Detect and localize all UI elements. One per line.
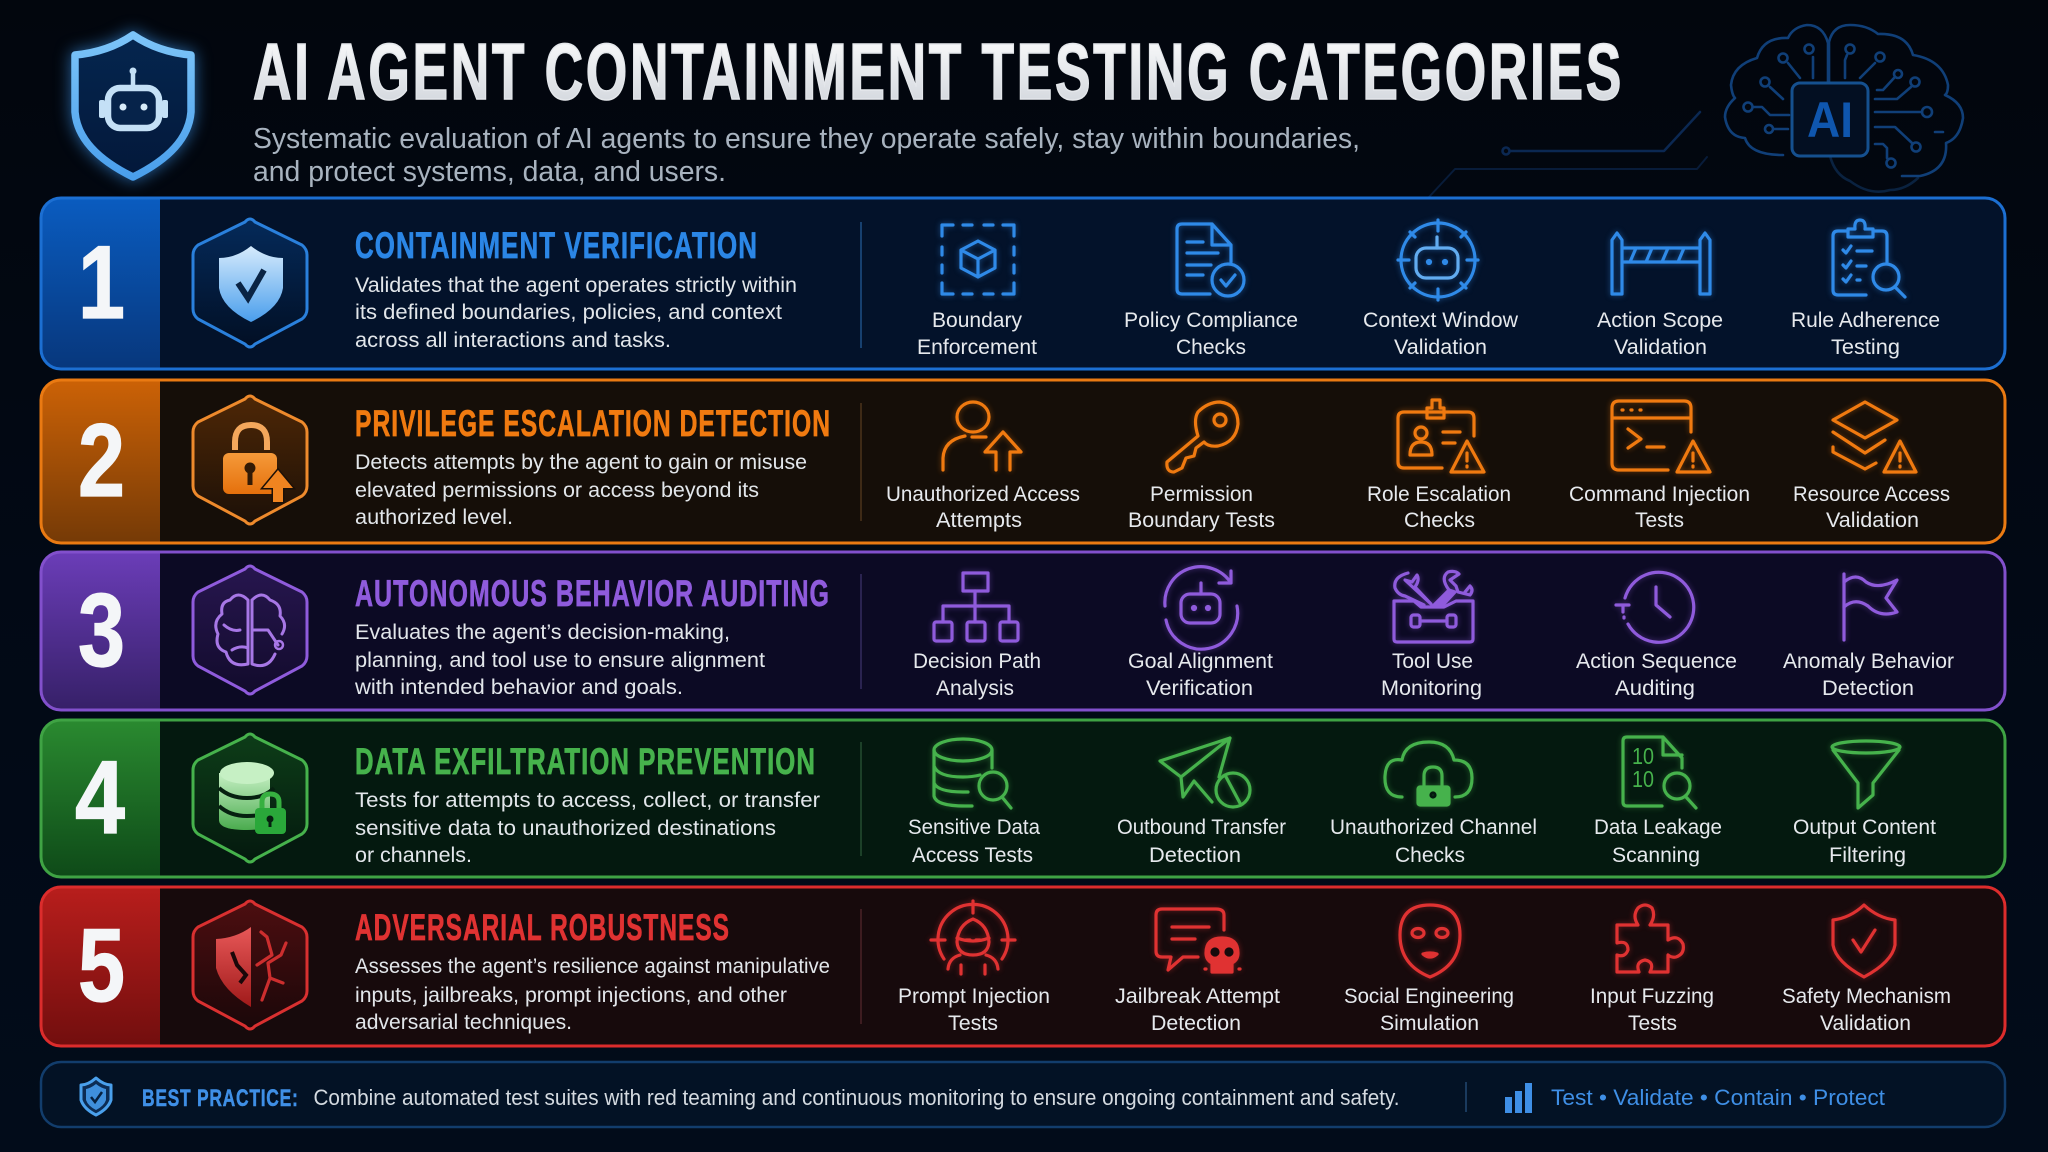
description bbox=[355, 789, 820, 867]
decorative AI brain circuit: AI bbox=[1807, 92, 1853, 148]
item: command injection tests: Tests bbox=[1635, 509, 1684, 532]
item: role escalation checks: Role Escalation bbox=[1367, 483, 1511, 506]
item: sensitive data access tests: Access Tests bbox=[912, 844, 1033, 867]
item: outbound transfer detection: Outbound Transfer bbox=[1117, 816, 1286, 839]
decorative AI brain circuit bbox=[1429, 25, 1963, 197]
item: permission boundary tests bbox=[1128, 402, 1275, 532]
item: tool use monitoring bbox=[1381, 571, 1482, 700]
item: data leakage scanning bbox=[1594, 737, 1722, 867]
item: anomaly behavior detection: Anomaly Behavior bbox=[1783, 650, 1954, 673]
item: sensitive data access tests: Sensitive Data bbox=[908, 816, 1040, 839]
description: Evaluates the agent’s decision-making, bbox=[355, 621, 730, 644]
number 1: 1 bbox=[78, 225, 125, 341]
motto: Test • Validate • Contain • Protect bbox=[1551, 1085, 1885, 1110]
footer: best practice bar bbox=[41, 1062, 2005, 1127]
item: policy compliance checks: Policy Compliance bbox=[1124, 309, 1298, 332]
item: data leakage scanning: Data Leakage bbox=[1594, 816, 1722, 839]
item: decision path analysis bbox=[913, 573, 1041, 700]
item: permission boundary tests: Permission bbox=[1150, 483, 1253, 506]
item: boundary enforcement: Enforcement bbox=[917, 336, 1037, 359]
subtitle: Systematic evaluation of AI agents to ensure they operate safely, stay within boundaries, bbox=[253, 123, 1360, 155]
item: data leakage scanning: 10 bbox=[1632, 766, 1654, 792]
item: safety mechanism validation: Safety Mechanism bbox=[1782, 985, 1951, 1008]
description: its defined boundaries, policies, and context bbox=[355, 301, 782, 324]
number 4: 4 bbox=[75, 740, 125, 856]
item: social engineering simulation: Simulation bbox=[1380, 1012, 1479, 1035]
panel: 3 autonomous behavior auditing bbox=[41, 552, 2005, 710]
item: role escalation checks: Checks bbox=[1404, 509, 1475, 532]
hexagon icon: brain bbox=[193, 566, 307, 694]
item: decision path analysis: Analysis bbox=[936, 677, 1014, 700]
hexagon icon: cracked shield bbox=[193, 901, 307, 1029]
item: social engineering simulation: Social Engineering bbox=[1344, 985, 1514, 1008]
best practice label: BEST PRACTICE: bbox=[142, 1085, 298, 1112]
best practice text: Combine automated test suites with red teaming and continuous monitoring to ensure ongoing containment and safety. bbox=[314, 1085, 1400, 1110]
item: boundary enforcement: Boundary bbox=[932, 309, 1022, 332]
header shield robot logo bbox=[75, 35, 191, 177]
item: action sequence auditing: Auditing bbox=[1615, 677, 1695, 700]
description: Validates that the agent operates strictly within bbox=[355, 274, 797, 297]
description bbox=[355, 955, 830, 1034]
item: output content filtering bbox=[1793, 741, 1936, 867]
item: goal alignment verification: Goal Alignment bbox=[1128, 650, 1273, 673]
item: tool use monitoring: Monitoring bbox=[1381, 677, 1482, 700]
description: elevated permissions or access beyond its bbox=[355, 479, 759, 502]
item: output content filtering: Filtering bbox=[1829, 844, 1906, 867]
icon: bars bbox=[1505, 1083, 1532, 1113]
item: outbound transfer detection: Detection bbox=[1149, 844, 1241, 867]
item: action scope validation: Action Scope bbox=[1597, 309, 1723, 332]
item: unauthorized channel checks: Checks bbox=[1395, 844, 1465, 867]
description: inputs, jailbreaks, prompt injections, and other bbox=[355, 984, 787, 1007]
item: unauthorized access attempts bbox=[886, 402, 1080, 532]
panel: 5 adversarial robustness bbox=[41, 887, 2005, 1046]
item: context window validation: Context Window bbox=[1363, 309, 1519, 332]
number 5: 5 bbox=[78, 908, 125, 1024]
description: adversarial techniques. bbox=[355, 1011, 572, 1034]
item: resource access validation: Resource Access bbox=[1793, 483, 1950, 506]
panel: 1 containment verification bbox=[41, 198, 2005, 369]
item: input fuzzing tests bbox=[1590, 905, 1714, 1035]
item: decision path analysis: Decision Path bbox=[913, 650, 1041, 673]
hexagon icon: database lock bbox=[193, 734, 307, 862]
item: data leakage scanning: Scanning bbox=[1612, 844, 1700, 867]
item: jailbreak attempt detection bbox=[1115, 909, 1280, 1035]
subtitle bbox=[253, 123, 1360, 188]
panel: 4 data exfiltration prevention bbox=[41, 720, 2005, 877]
heading: DATA EXFILTRATION PREVENTION bbox=[355, 741, 816, 782]
item: unauthorized channel checks bbox=[1330, 742, 1537, 867]
hexagon icon: lock with arrow bbox=[193, 396, 307, 524]
description bbox=[355, 451, 807, 529]
heading: ADVERSARIAL ROBUSTNESS bbox=[355, 907, 730, 948]
number 2: 2 bbox=[78, 403, 125, 519]
description: sensitive data to unauthorized destinations bbox=[355, 817, 776, 840]
item: resource access validation bbox=[1793, 402, 1950, 532]
item: anomaly behavior detection bbox=[1783, 574, 1954, 700]
item: role escalation checks bbox=[1367, 400, 1511, 532]
description: with intended behavior and goals. bbox=[354, 676, 683, 699]
panel: 2 privilege escalation detection bbox=[41, 380, 2005, 543]
item: goal alignment verification: Verification bbox=[1146, 677, 1253, 700]
item: social engineering simulation bbox=[1344, 905, 1514, 1035]
item: prompt injection tests: Tests bbox=[948, 1012, 998, 1035]
item: jailbreak attempt detection: Detection bbox=[1151, 1012, 1241, 1035]
item: rule adherence testing: Rule Adherence bbox=[1791, 309, 1940, 332]
item: output content filtering: Output Content bbox=[1793, 816, 1936, 839]
item: input fuzzing tests: Input Fuzzing bbox=[1590, 985, 1714, 1008]
hexagon icon: shield check bbox=[193, 219, 307, 347]
description bbox=[354, 621, 765, 699]
description: planning, and tool use to ensure alignment bbox=[355, 649, 765, 672]
item: input fuzzing tests: Tests bbox=[1628, 1012, 1677, 1035]
item: tool use monitoring: Tool Use bbox=[1392, 650, 1473, 673]
item: unauthorized channel checks: Unauthorized Channel bbox=[1330, 816, 1537, 839]
item: action sequence auditing bbox=[1576, 572, 1737, 700]
description bbox=[355, 274, 797, 352]
description: authorized level. bbox=[355, 506, 513, 529]
item: safety mechanism validation: Validation bbox=[1820, 1012, 1911, 1035]
item: safety mechanism validation bbox=[1782, 905, 1951, 1035]
item: prompt injection tests: Prompt Injection bbox=[898, 985, 1050, 1008]
description: or channels. bbox=[355, 844, 472, 867]
item: command injection tests bbox=[1569, 401, 1750, 532]
item: policy compliance checks: Checks bbox=[1176, 336, 1246, 359]
item: action scope validation bbox=[1597, 233, 1723, 359]
item: sensitive data access tests bbox=[908, 739, 1040, 867]
item: goal alignment verification bbox=[1128, 567, 1273, 700]
item: anomaly behavior detection: Detection bbox=[1822, 677, 1914, 700]
description: across all interactions and tasks. bbox=[355, 329, 671, 352]
item: jailbreak attempt detection: Jailbreak Attempt bbox=[1115, 985, 1280, 1008]
item: rule adherence testing: Testing bbox=[1831, 336, 1900, 359]
heading: CONTAINMENT VERIFICATION bbox=[355, 225, 758, 266]
item: command injection tests: Command Injection bbox=[1569, 483, 1750, 506]
item: prompt injection tests bbox=[898, 901, 1050, 1035]
item: context window validation bbox=[1363, 220, 1519, 359]
item: permission boundary tests: Boundary Tests bbox=[1128, 509, 1275, 532]
item: context window validation: Validation bbox=[1394, 336, 1487, 359]
description: Assesses the agent’s resilience against manipulative bbox=[355, 955, 830, 978]
item: action scope validation: Validation bbox=[1614, 336, 1707, 359]
heading: PRIVILEGE ESCALATION DETECTION bbox=[355, 403, 831, 444]
item: rule adherence testing bbox=[1791, 220, 1940, 359]
heading: AUTONOMOUS BEHAVIOR AUDITING bbox=[355, 573, 830, 614]
icon: footer shield bbox=[81, 1078, 111, 1115]
item: outbound transfer detection bbox=[1117, 738, 1286, 867]
item: unauthorized access attempts: Unauthorized Access bbox=[886, 483, 1080, 506]
item: boundary enforcement bbox=[917, 225, 1037, 359]
description: Detects attempts by the agent to gain or misuse bbox=[355, 451, 807, 474]
item: unauthorized access attempts: Attempts bbox=[936, 509, 1022, 532]
item: policy compliance checks bbox=[1124, 224, 1298, 359]
subtitle: and protect systems, data, and users. bbox=[253, 156, 726, 188]
description: Tests for attempts to access, collect, or transfer bbox=[355, 789, 820, 812]
number 3: 3 bbox=[78, 573, 125, 689]
item: data leakage scanning: 10 bbox=[1632, 743, 1654, 769]
item: action sequence auditing: Action Sequence bbox=[1576, 650, 1737, 673]
item: resource access validation: Validation bbox=[1826, 509, 1919, 532]
